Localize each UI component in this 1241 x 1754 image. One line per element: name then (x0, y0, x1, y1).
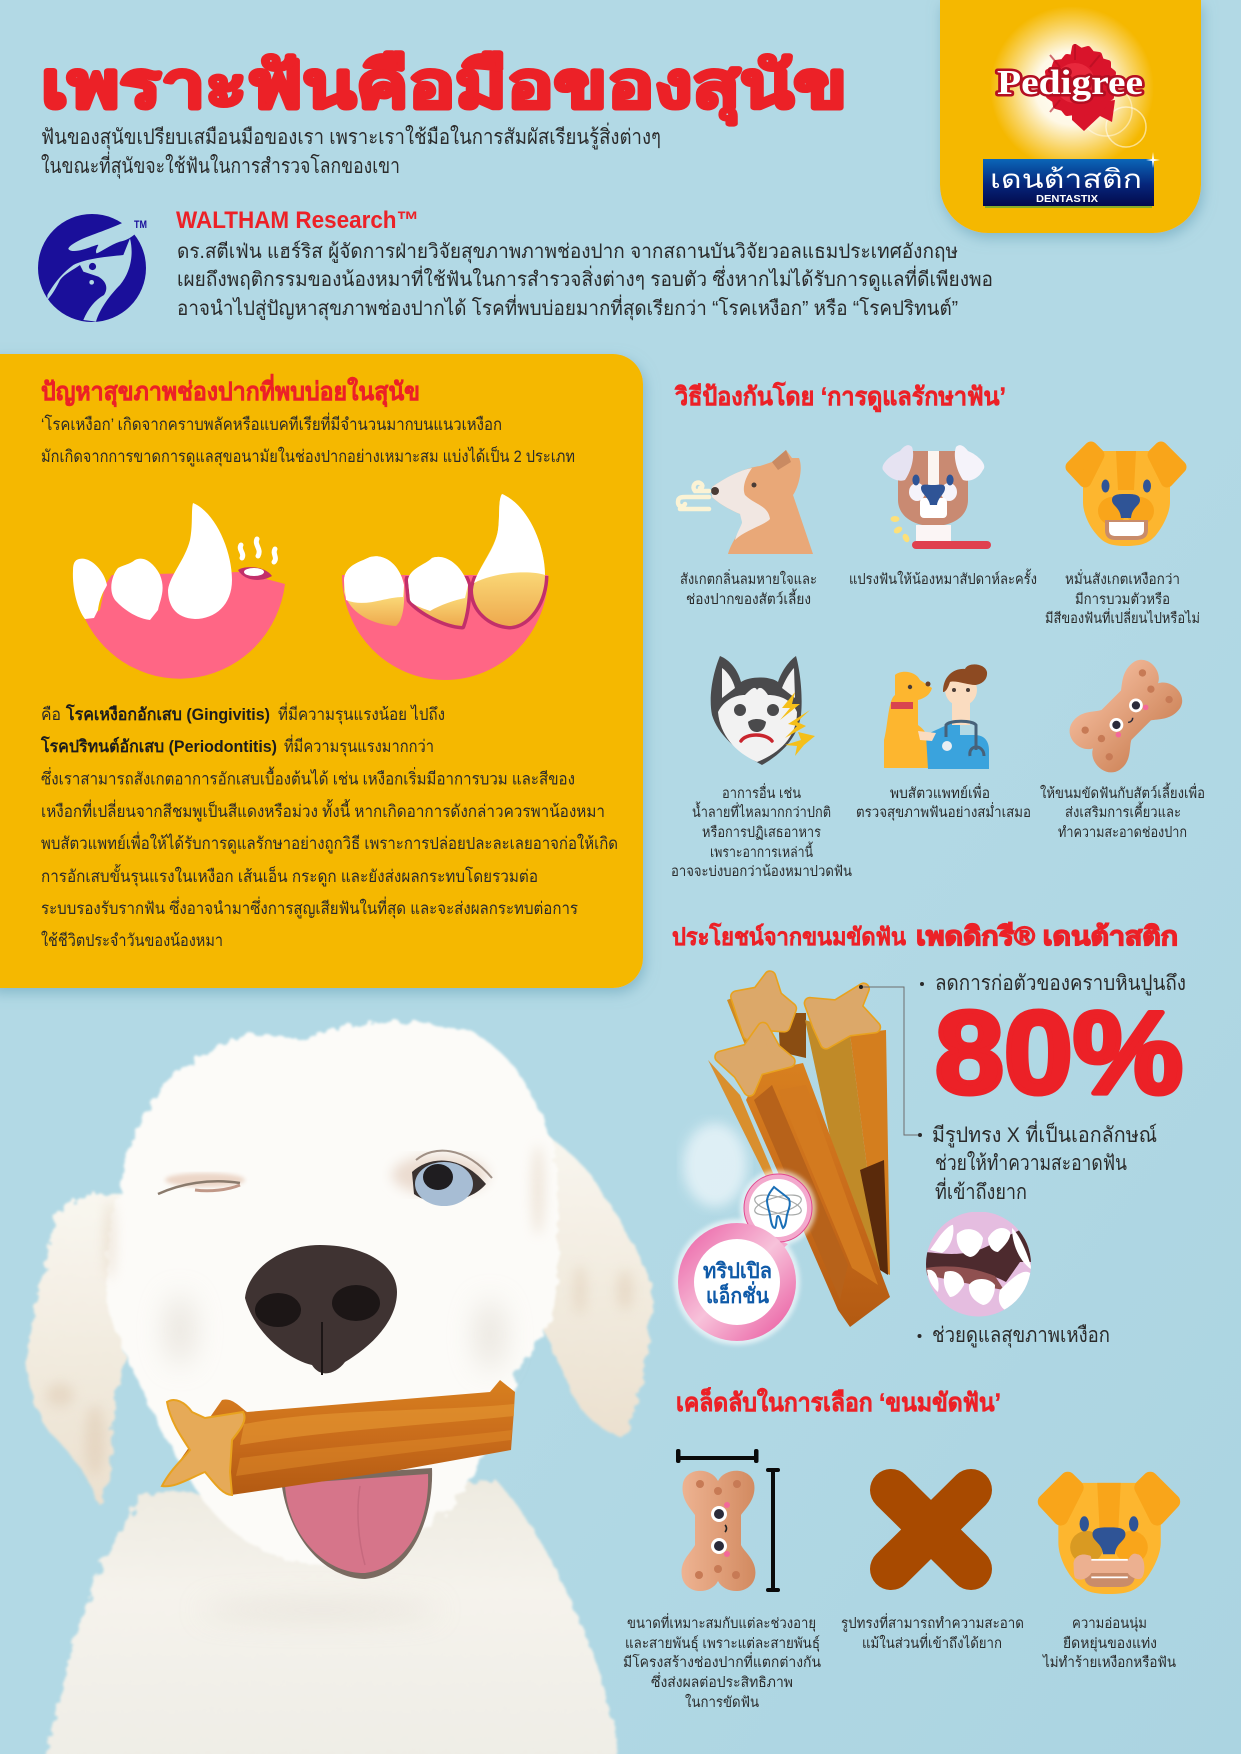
caption: softness: ไม่ทำร้ายเหงือกหรือฟัน (1042, 1653, 1176, 1671)
panel body text: คือ (41, 705, 61, 724)
caption: shape (841, 1613, 1024, 1652)
icon: yellow dog with bone (1045, 1479, 1173, 1594)
logo: Waltham: TM (134, 219, 147, 231)
caption: other symptoms: อาจจะบ่งบอกว่าน้องหมาปวดฟัน (671, 863, 852, 880)
head (105, 1022, 559, 1565)
illustration: healthy-looking gum with bad breath (73, 503, 285, 679)
caption: breath (680, 569, 817, 608)
benefit: X shape (918, 1120, 1157, 1204)
panel body text: โรคเหงือกอักเสบ (Gingivitis) (65, 704, 270, 724)
caption: other symptoms (671, 783, 852, 880)
caption: gums check: มีสีของฟันที่เปลี่ยนไปหรือไม่ (1045, 608, 1200, 627)
panel intro text: ‘โรคเหงือก’ เกิดจากคราบพลัคหรือแบคทีเรียที่มีจำนวนมากบนแนวเหงือก (41, 412, 502, 434)
decorative glow swirl (683, 1123, 747, 1207)
icon: dog tooth brushing (882, 445, 991, 549)
caption: shape: แม้ในส่วนที่เข้าถึงได้ยาก (862, 1633, 1002, 1652)
panel body text: ที่มีความรุนแรงน้อย ไปถึง (278, 702, 445, 725)
caption: size (623, 1613, 821, 1711)
icon: yellow dog gums check (1072, 448, 1180, 546)
dental stick in mouth (162, 1380, 515, 1495)
face shading (166, 1295, 504, 1618)
front stick (708, 1028, 890, 1327)
panel: brand logos (940, 0, 1201, 233)
panel body text: การอักเสบขั้นรุนแรงในเหงือก เส้นเอ็น กระดูก และยังส่งผลกระทบโดยรวมต่อ (41, 864, 538, 887)
caption: shape: รูปทรงที่สามารถทำความสะอาด (841, 1613, 1024, 1632)
section: tips for choosing dental chews (623, 1387, 1176, 1711)
caption: softness: ยืดหยุ่นของแท่ง (1063, 1635, 1157, 1652)
nose (245, 1245, 397, 1375)
heading: วิธีป้องกันโดย ‘การดูแลรักษาฟัน’ (674, 381, 1006, 413)
caption: other symptoms: เพราะอาการเหล่านี้ (710, 841, 813, 861)
right ear (510, 1120, 652, 1440)
Waltham paragraph (177, 240, 993, 321)
logo: Dentastix (983, 152, 1160, 208)
winking eye (158, 1173, 245, 1194)
caption: breath: สังเกตกลิ่นลมหายใจและ (680, 569, 817, 588)
icon: tooth orbit (753, 1187, 803, 1228)
caption: size: ขนาดที่เหมาะสมกับแต่ละช่วงอายุ (627, 1613, 816, 1632)
dog body (46, 1481, 619, 1754)
left ear (27, 1192, 140, 1505)
icon: smiling bone (1063, 653, 1189, 779)
icon: dog breath (678, 450, 813, 554)
panel body text: โรคปริทนต์อักเสบ (Periodontitis) (40, 736, 277, 756)
illustration: inflamed gum with tartar (342, 494, 548, 680)
icon: bone with size bars (676, 1449, 780, 1592)
Waltham paragraph: เผยถึงพฤติกรรมของน้องหมาที่ใช้ฟันในการสำรวจสิ่งต่างๆ รอบตัว ซึ่งหากไม่ได้รับการดูแลที่ดีเพียงพอ (177, 265, 993, 292)
callout line (859, 985, 918, 1135)
caption: dental chew: ทำความสะอาดช่องปาก (1058, 825, 1187, 841)
benefit: tartar reduction (920, 972, 1186, 1118)
benefit: tartar reduction: ลดการก่อตัวของคราบหินปูนถึง (935, 972, 1186, 996)
section: prevention by dental care (671, 381, 1205, 880)
caption: brushing: แปรงฟันให้น้องหมาสัปดาห์ละครั้ง (849, 568, 1037, 588)
icon: X shape (891, 1490, 971, 1569)
caption: dental chew: ให้ขนมขัดฟันกับสัตว์เลี้ยงเพื่อ (1040, 782, 1205, 802)
intro text: ในขณะที่สุนัขจะใช้ฟันในการสำรวจโลกของเขา (41, 151, 400, 179)
big number: 80% (935, 987, 1183, 1118)
caption: dental chew: ส่งเสริมการเคี้ยวและ (1065, 801, 1181, 821)
section: Dentastix benefits (672, 921, 1186, 1348)
caption: size: ซึ่งส่งผลต่อประสิทธิภาพ (651, 1672, 793, 1691)
panel body text: พบสัตวแพทย์เพื่อให้ได้รับการดูแลรักษาอย่างถูกวิธี เพราะการปล่อยปละละเลยอาจก่อให้เกิด (41, 831, 618, 854)
heading: เคล็ดลับในการเลือก ‘ขนมขัดฟัน’ (676, 1387, 1001, 1417)
photo: smiling white dog with dental stick (27, 1022, 652, 1754)
panel body text: เหงือกที่เปลี่ยนจากสีชมพูเป็นสีแดงหรือม่วง ทั้งนี้ หากเกิดอาการดังกล่าวควรพาน้องหมา (41, 799, 605, 822)
panel body text (40, 702, 618, 950)
caption: size: และสายพันธุ์ เพราะแต่ละสายพันธุ์ (625, 1635, 820, 1652)
heading: ประโยชน์จากขนมขัดฟัน (672, 922, 907, 951)
benefit: X shape: มีรูปทรง X ที่เป็นเอกลักษณ์ (932, 1120, 1157, 1148)
icon: teeth circle (926, 1212, 1032, 1317)
panel intro text: มักเกิดจากการขาดการดูแลสุขอนามัยในช่องปากอย่างเหมาะสม แบ่งได้เป็น 2 ประเภท (41, 445, 575, 467)
icon: vet with dog (884, 664, 989, 769)
caption: dental chew (1040, 782, 1205, 841)
panel body text: ที่มีความรุนแรงมากกว่า (284, 734, 434, 757)
ear shading (46, 1145, 633, 1475)
caption: gums check: หมั่นสังเกตเหงือกว่า (1065, 569, 1180, 588)
badge: triple action: ทริปเปิล (703, 1260, 772, 1283)
panel body text: ซึ่งเราสามารถสังเกตอาการอักเสบเบื้องต้นได้ เช่น เหงือกเริ่มมีอาการบวม และสีของ (41, 766, 575, 788)
panel heading: ปัญหาสุขภาพช่องปากที่พบบ่อยในสุนัข (41, 374, 420, 408)
caption: breath: ช่องปากของสัตว์เลี้ยง (686, 588, 811, 608)
benefit: gum health: ช่วยดูแลสุขภาพเหงือก (932, 1324, 1110, 1348)
intro text: ฟันของสุนัขเปรียบเสมือนมือของเรา เพราะเราใช้มือในการสัมผัสเรียนรู้สิ่งต่างๆ (41, 122, 661, 150)
intro text (41, 122, 661, 179)
caption: size: มีโครงสร้างช่องปากที่แตกต่างกัน (623, 1652, 821, 1671)
back left stick (727, 977, 806, 1058)
benefit: X shape: ที่เข้าถึงยาก (935, 1177, 1027, 1204)
caption: other symptoms: น้ำลายที่ไหลมากกว่าปกติ (692, 801, 831, 821)
logo: Dentastix: เดนต้าสติก (990, 164, 1142, 194)
badge: triple action: แอ็กชั่น (706, 1280, 770, 1308)
panel: oral health problems (0, 354, 643, 988)
logo: Pedigree: Pedigree (997, 63, 1143, 102)
heading (672, 921, 1178, 951)
caption: vet visit: พบสัตวแพทย์เพื่อ (890, 783, 990, 802)
product: dental sticks (708, 977, 890, 1327)
panel body text: ระบบรองรับรากฟัน ซึ่งอาจนำมาซึ่งการสูญเสียฟันในที่สุด และจะส่งผลกระทบต่อการ (41, 896, 578, 919)
caption: softness (1042, 1616, 1176, 1671)
caption: vet visit: ตรวจสุขภาพฟันอย่างสม่ำเสมอ (856, 802, 1031, 821)
caption: size: ในการขัดฟัน (685, 1693, 759, 1711)
caption: vet visit (856, 783, 1031, 821)
caption: other symptoms: อาการอื่น เช่น (722, 783, 801, 802)
panel body text: ใช้ชีวิตประจำวันของน้องหมา (41, 930, 223, 950)
icon: husky with toothache (711, 656, 815, 765)
caption: other symptoms: หรือการปฏิเสธอาหาร (702, 824, 821, 841)
heading: Waltham Research: WALTHAM Research™ (176, 207, 419, 234)
heading: เพดดิกรี® เดนต้าสติก (916, 921, 1178, 951)
logo: Pedigree (990, 6, 1154, 170)
panel intro text (41, 412, 575, 467)
benefit: X shape: ช่วยให้ทำความสะอาดฟัน (935, 1151, 1127, 1175)
open mouth and tongue (281, 1468, 432, 1579)
Waltham paragraph: อาจนำไปสู่ปัญหาสุขภาพช่องปากได้ โรคที่พบบ่อยมากที่สุดเรียกว่า “โรคเหงือก” หรือ “โรคปริทนต์” (177, 294, 958, 321)
caption: softness: ความอ่อนนุ่ม (1072, 1616, 1147, 1632)
logo: Waltham (38, 214, 147, 322)
open eye (392, 1151, 492, 1206)
back right stick (805, 989, 890, 1275)
badge: triple action (674, 1170, 816, 1345)
Waltham paragraph: ดร.สตีเฟ่น แฮร์ริส ผู้จัดการฝ่ายวิจัยสุขภาพภาพช่องปาก จากสถานบันวิจัยวอลแธมประเทศอังกฤษ (177, 240, 958, 264)
caption: gums check (1045, 569, 1200, 627)
title: เพราะฟันคือมือของสุนัข (41, 49, 847, 125)
logo: Dentastix: DENTASTIX (1036, 194, 1098, 205)
caption: gums check: มีการบวมตัวหรือ (1075, 591, 1170, 608)
